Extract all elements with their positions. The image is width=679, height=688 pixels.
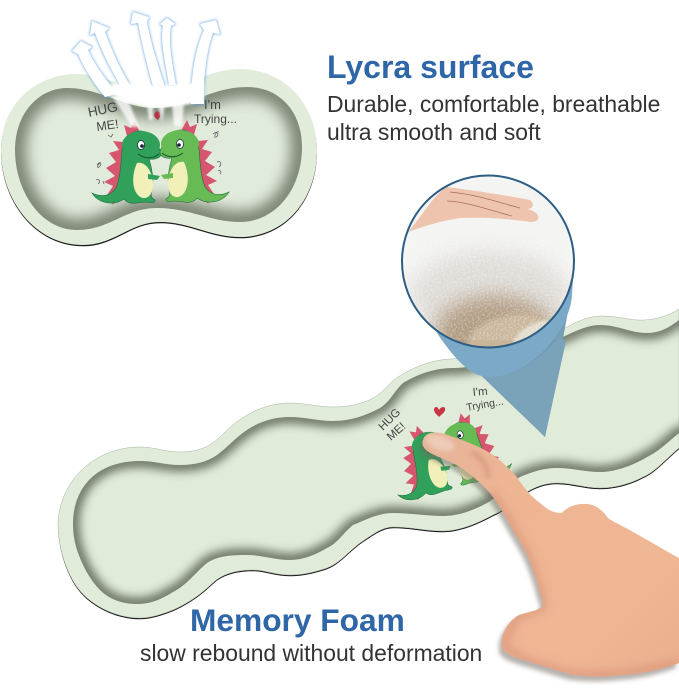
panel: memory foam pad <box>58 300 679 619</box>
hand edge shading <box>490 493 679 675</box>
callout: magnified foam photo <box>401 174 575 348</box>
hand lettering: me: ME! <box>95 117 119 134</box>
hand lettering: me: ME! <box>385 421 408 443</box>
callout: magnifier cone <box>402 262 574 437</box>
doodles <box>96 132 221 184</box>
foam depression <box>426 282 558 346</box>
hand lettering: trying: Trying... <box>465 396 504 414</box>
hand lettering: I'm: I'm <box>472 386 488 399</box>
text: memory foam caption: slow rebound without deformation <box>140 640 482 666</box>
panel: lycra pad <box>1 69 317 246</box>
hand lettering: hug: HUG <box>377 407 403 433</box>
heart <box>434 407 445 417</box>
heading: Memory Foam: Memory Foam <box>190 602 405 638</box>
fingertip highlight <box>425 432 455 452</box>
hand lettering: hug: HUG <box>87 99 119 120</box>
icon: breathable airflow arrows <box>72 12 220 127</box>
text: lycra line 1: Durable, comfortable, breathable <box>327 91 660 117</box>
grey foam shading <box>410 250 570 340</box>
heading: Lycra surface: Lycra surface <box>327 49 534 85</box>
dinosaurs on memory foam pad <box>377 386 514 505</box>
hand lettering: I'm: I'm <box>204 97 221 112</box>
icon: pointing hand <box>419 431 679 682</box>
hand lettering: trying: Trying... <box>194 112 237 126</box>
hand pressing foam <box>408 187 538 232</box>
knuckle crease <box>472 452 488 478</box>
dinosaurs on lycra pad <box>87 97 237 205</box>
small heart <box>154 111 160 120</box>
text: lycra line 2: ultra smooth and soft <box>327 119 541 145</box>
